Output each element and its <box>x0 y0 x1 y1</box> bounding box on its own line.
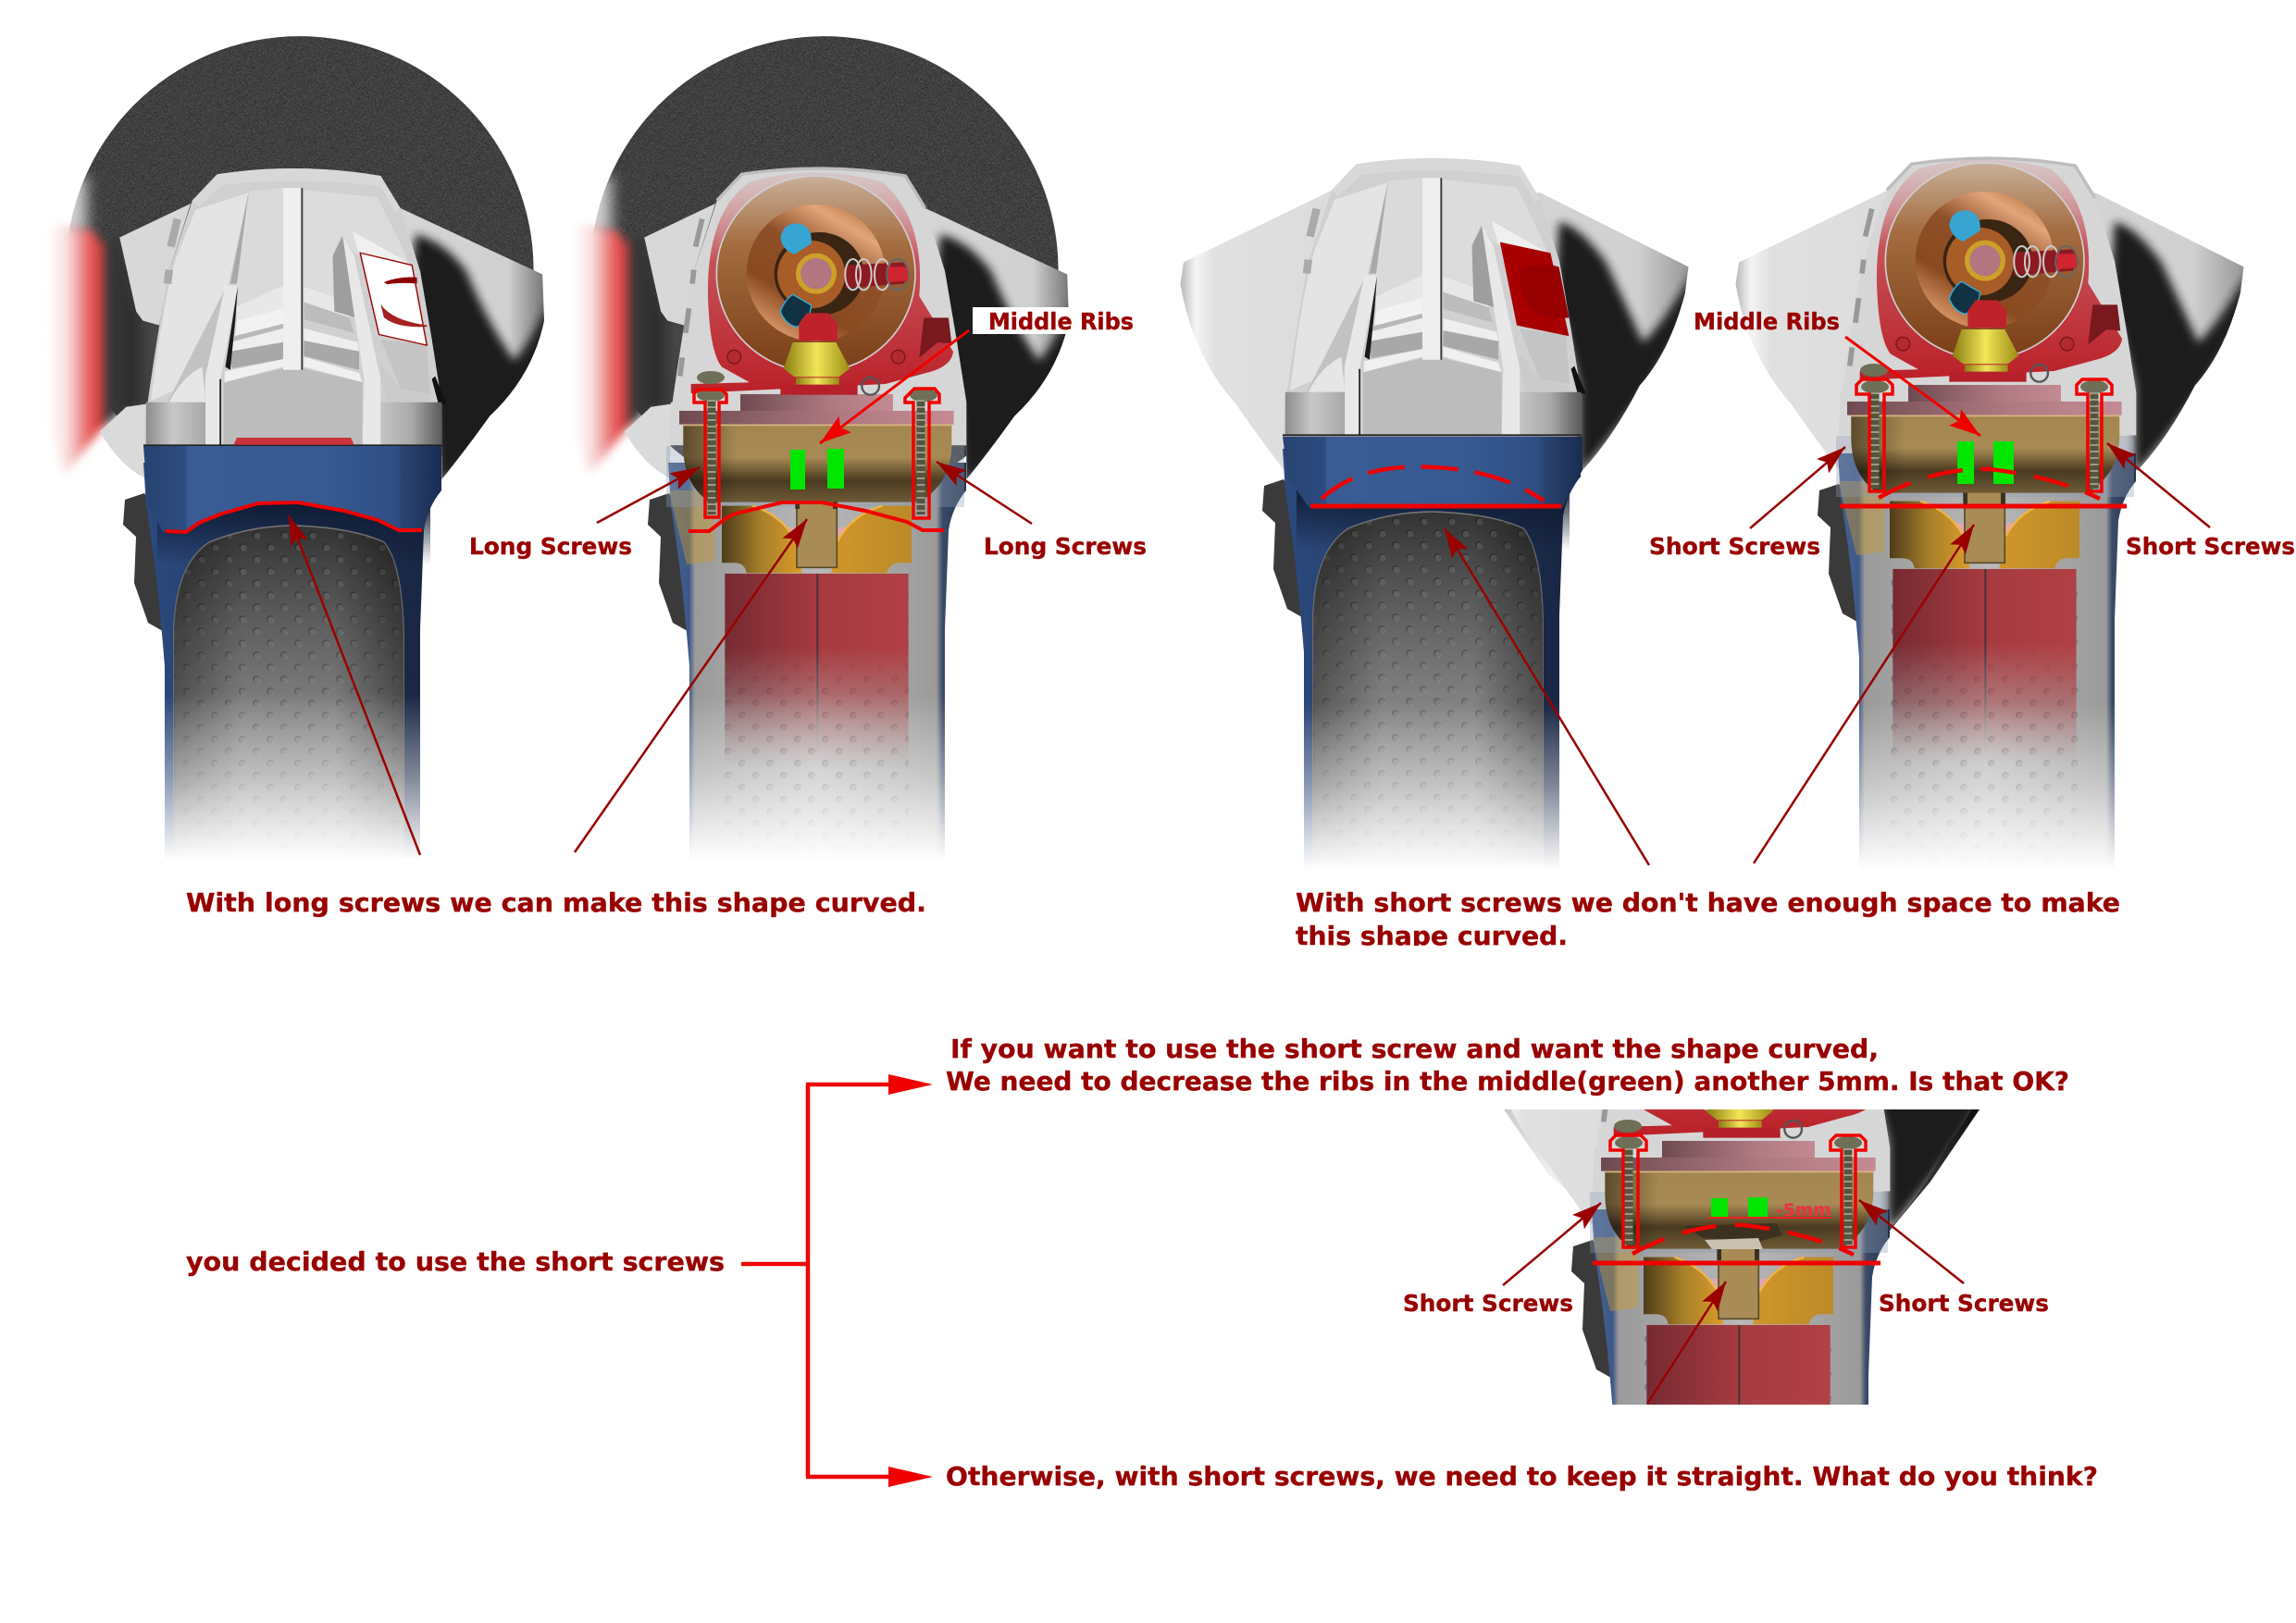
red straight line <box>1593 1260 1880 1266</box>
red underline at ribs <box>1708 1217 1831 1219</box>
arrow: short screw right, option panel <box>1859 1200 1964 1283</box>
label: middle ribs: Middle Ribs <box>988 308 1134 335</box>
middle ribs label background <box>973 307 1140 334</box>
label: middle ribs: Middle Ribs <box>1694 308 1840 335</box>
arrow: long screw left <box>597 467 700 523</box>
arrow: middle ribs left panel <box>820 330 969 443</box>
blue straight band <box>1283 437 1582 508</box>
caption: short screws <box>1296 892 2119 946</box>
arrow: short screw left <box>1750 447 1845 528</box>
green decreased ribs <box>1711 1197 1768 1217</box>
arrow: bottom of curved shape, long exterior <box>289 515 420 855</box>
label: short screws left: Short Screws <box>1649 533 1820 560</box>
long screws <box>694 371 939 518</box>
caption: short screws: this shape curved. <box>1296 921 1568 951</box>
arrow: short screw right <box>2107 443 2210 527</box>
option one text: If you want to use the short screw and want the shape curved, <box>950 1034 1879 1064</box>
arrow: middle ribs right panel <box>1845 337 1980 436</box>
red switch <box>1500 242 1569 336</box>
red dashed curve <box>1879 469 2100 499</box>
label: short screws left: Short Screws <box>1403 1290 1573 1317</box>
option two text: Otherwise, with short screws, we need to keep it straight. What do you think? <box>946 1461 2098 1492</box>
panel: long screws exterior view <box>31 36 552 934</box>
minus 5mm label: -5mm <box>1776 1200 1831 1220</box>
panel: long screws cutaway view <box>555 36 1077 934</box>
guard <box>1180 192 1694 475</box>
red dashed curve <box>1322 466 1544 501</box>
panel: short screws exterior view <box>1180 158 1694 924</box>
label: long screws right: Long Screws <box>984 533 1147 560</box>
on/off switch with white label <box>233 253 427 445</box>
guard edges widened under the crop <box>1504 1109 1980 1231</box>
caption: long screws: With long screws we can make this shape curved. <box>186 887 926 918</box>
arrow: curved shape, long cutaway <box>575 519 807 852</box>
panel: short screws cutaway view <box>1735 158 2249 924</box>
red dashed curve <box>1632 1225 1854 1255</box>
arrow: long screw right <box>937 462 1032 524</box>
green middle ribs <box>1957 441 2014 484</box>
statement: decision: you decided to use the short screws <box>186 1246 725 1277</box>
label: long screws left: Long Screws <box>469 533 632 560</box>
green middle ribs <box>790 449 844 489</box>
panel: proposed decreased ribs cutaway <box>1504 1109 1980 1405</box>
label: short screws right: Short Screws <box>1879 1290 2049 1317</box>
arrow: curved shape, option panel <box>1647 1282 1726 1404</box>
connector: branching red bracket <box>741 1074 933 1487</box>
red straight line <box>1840 503 2127 509</box>
red curved outline <box>166 502 422 532</box>
arrow: bottom of band, short cutaway <box>1754 525 1974 863</box>
option one text: We need to decrease the ribs in the middle(green) another 5mm. Is that OK? <box>946 1066 2069 1096</box>
label: short screws right: Short Screws <box>2126 533 2295 560</box>
caption: short screws: With short screws we don't have enough space to make <box>1296 887 2120 918</box>
dark patch at trimmed ribs <box>1684 1223 1781 1242</box>
blue curved band <box>143 446 441 532</box>
red curved outline <box>689 502 944 531</box>
arrow: bottom of band, short exterior <box>1445 528 1649 865</box>
arrow: short screw left, option panel <box>1503 1203 1601 1285</box>
option one text <box>946 1034 2069 1096</box>
red straight line <box>1310 503 1561 509</box>
